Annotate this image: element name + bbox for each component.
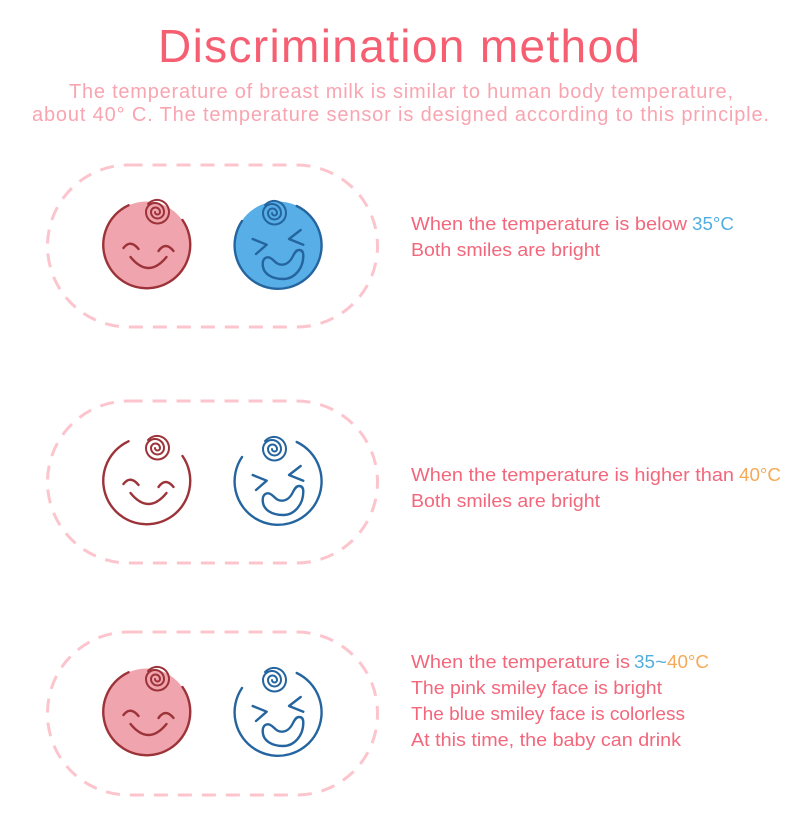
text: 35 to 40 degrees: When the temperature is (411, 652, 630, 672)
text: 35 to 40 degrees: The blue smiley face is colorless (411, 704, 685, 724)
text: below 35 degrees: 35°C (692, 214, 734, 234)
text: above 40 degrees: 40°C (739, 465, 781, 485)
title: Discrimination method (158, 20, 640, 72)
text: 35 to 40 degrees: 40°C (667, 652, 709, 672)
text: below 35 degrees (411, 214, 734, 260)
text: 35 to 40 degrees: ~ (655, 652, 667, 672)
icon: outline blue smiley (235, 437, 322, 525)
icon: outline blue smiley (235, 668, 322, 756)
intro text (32, 81, 769, 126)
icon: bright pink smiley (103, 200, 190, 288)
dashed outline (48, 165, 378, 327)
panel: below 35 degrees (48, 165, 378, 327)
intro text: about 40° C. The temperature sensor is designed according to this principle. (32, 104, 769, 126)
icon: outline pink smiley (103, 436, 190, 524)
icon: bright blue smiley (234, 201, 322, 289)
panel: 35 to 40 degrees (48, 632, 378, 795)
text: below 35 degrees: When the temperature is below (411, 214, 688, 234)
text: 35 to 40 degrees: The pink smiley face is bright (411, 678, 662, 698)
intro text: The temperature of breast milk is similar to human body temperature, (69, 81, 733, 103)
dashed outline (48, 401, 378, 563)
dashed outline (48, 632, 378, 795)
panel: above 40 degrees (48, 401, 378, 563)
text: 35 to 40 degrees (411, 652, 709, 750)
text: above 40 degrees: Both smiles are bright (411, 491, 600, 511)
text: above 40 degrees: When the temperature is higher than (411, 465, 734, 485)
icon: bright pink smiley (103, 667, 190, 756)
text: 35 to 40 degrees: At this time, the baby can drink (411, 730, 682, 750)
text: 35 to 40 degrees: 35 (634, 652, 655, 672)
text: below 35 degrees: Both smiles are bright (411, 240, 600, 260)
text: above 40 degrees (411, 465, 781, 511)
